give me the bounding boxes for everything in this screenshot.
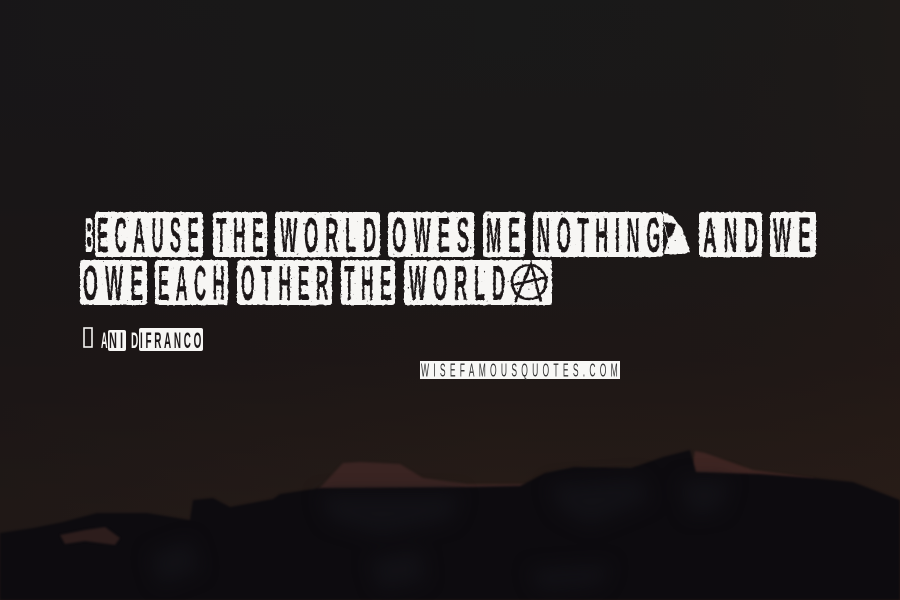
word: each (155, 257, 231, 311)
author name: NI (109, 328, 126, 353)
line 1: OWES (392, 209, 476, 263)
word: world. with anarchy symbol (404, 257, 552, 311)
line 2: OWE (83, 257, 150, 311)
line 2: EACH (158, 257, 231, 311)
line 1: ME (486, 209, 527, 263)
author attribution (84, 328, 204, 353)
word: we (770, 209, 818, 263)
word: world (275, 209, 383, 263)
text: WE (773, 209, 818, 263)
word: owe (80, 257, 150, 311)
line 2 (80, 257, 552, 311)
icon: anarchy symbol (512, 264, 548, 302)
line 1: AND (703, 209, 765, 263)
author name (101, 328, 204, 353)
text: WISEFAMOUSQUOTES.COM (421, 360, 622, 380)
text: IFRANCO (140, 328, 204, 353)
line 1: ECAUSE (97, 209, 205, 263)
background: mountain range (0, 450, 900, 600)
word: owes (388, 209, 476, 263)
word: world. with anarchy symbol: WORLD (409, 257, 512, 311)
line 2: THE (344, 257, 398, 311)
word: other (237, 257, 335, 311)
sunlit peak: left (60, 527, 120, 545)
comma mark (663, 212, 690, 254)
word: Because (85, 209, 205, 263)
line 1: THE (216, 209, 270, 263)
comma mark: , (668, 215, 674, 237)
quote text (80, 209, 818, 311)
sunlit peak: centre (318, 462, 530, 494)
line 2: OTHER (241, 257, 335, 311)
word: world. with anarchy symbol: . (527, 279, 530, 293)
mountain silhouette (0, 450, 900, 600)
sunlit peak: right (690, 451, 820, 486)
watermark: wisefamousquotes.com (420, 360, 622, 380)
rock highlights (150, 478, 730, 590)
author name: A (101, 328, 110, 353)
author name: D (131, 328, 141, 353)
line 1: WORLD (280, 209, 383, 263)
word: me (483, 209, 527, 263)
word: the (213, 209, 270, 263)
line 1 (85, 209, 818, 263)
icon: missing-glyph box (84, 328, 92, 347)
word: the (341, 257, 398, 311)
word: Because: B (85, 209, 98, 263)
word: nothing, (533, 209, 690, 263)
word: and (699, 209, 765, 263)
line 1: NOTHING (537, 209, 667, 263)
